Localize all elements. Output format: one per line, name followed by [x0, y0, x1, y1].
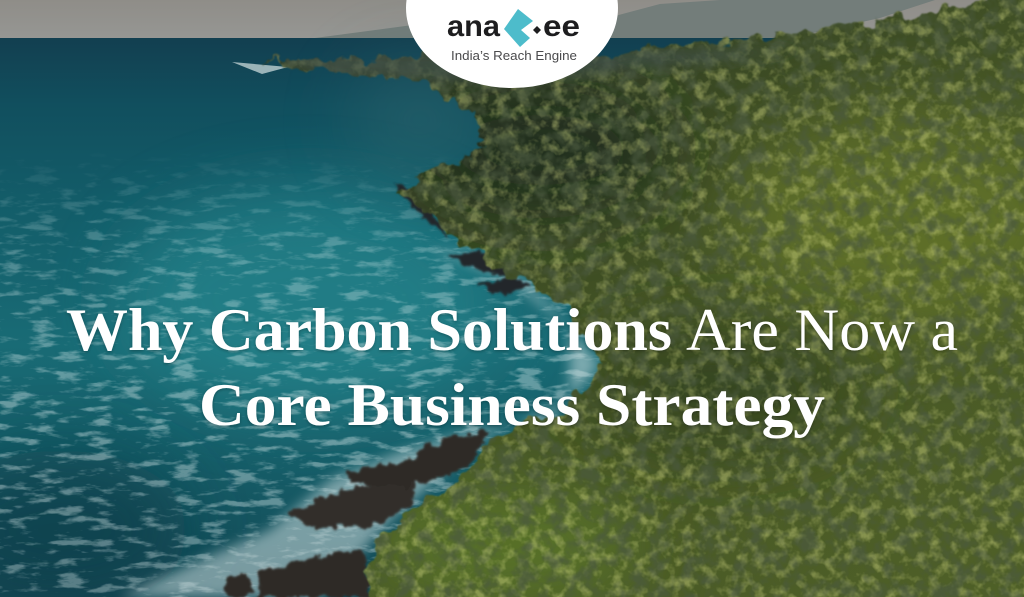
- background photo: rocky shoreline: [224, 182, 528, 597]
- title line 1: regular: Are Now a: [686, 297, 958, 363]
- background photo: forest: [262, 0, 1024, 597]
- logo mark: small black diamond: [533, 26, 541, 34]
- background photo: sea: [0, 38, 776, 597]
- title: [66, 297, 958, 438]
- title line 2: bold: Core Business Strategy: [199, 372, 825, 438]
- badge background: [406, 0, 618, 88]
- logo tagline: India’s Reach Engine: [451, 49, 577, 63]
- logo badge: [406, 0, 618, 88]
- logo wordmark: ana: ana: [447, 10, 500, 43]
- shoreline foam: [120, 248, 600, 597]
- background photo: sky and distant hills: [0, 0, 1024, 62]
- logo mark: teal diamond: [504, 9, 533, 47]
- logo wordmark: ee: ee: [543, 10, 580, 43]
- title line 1: bold: Why Carbon Solutions: [66, 297, 672, 363]
